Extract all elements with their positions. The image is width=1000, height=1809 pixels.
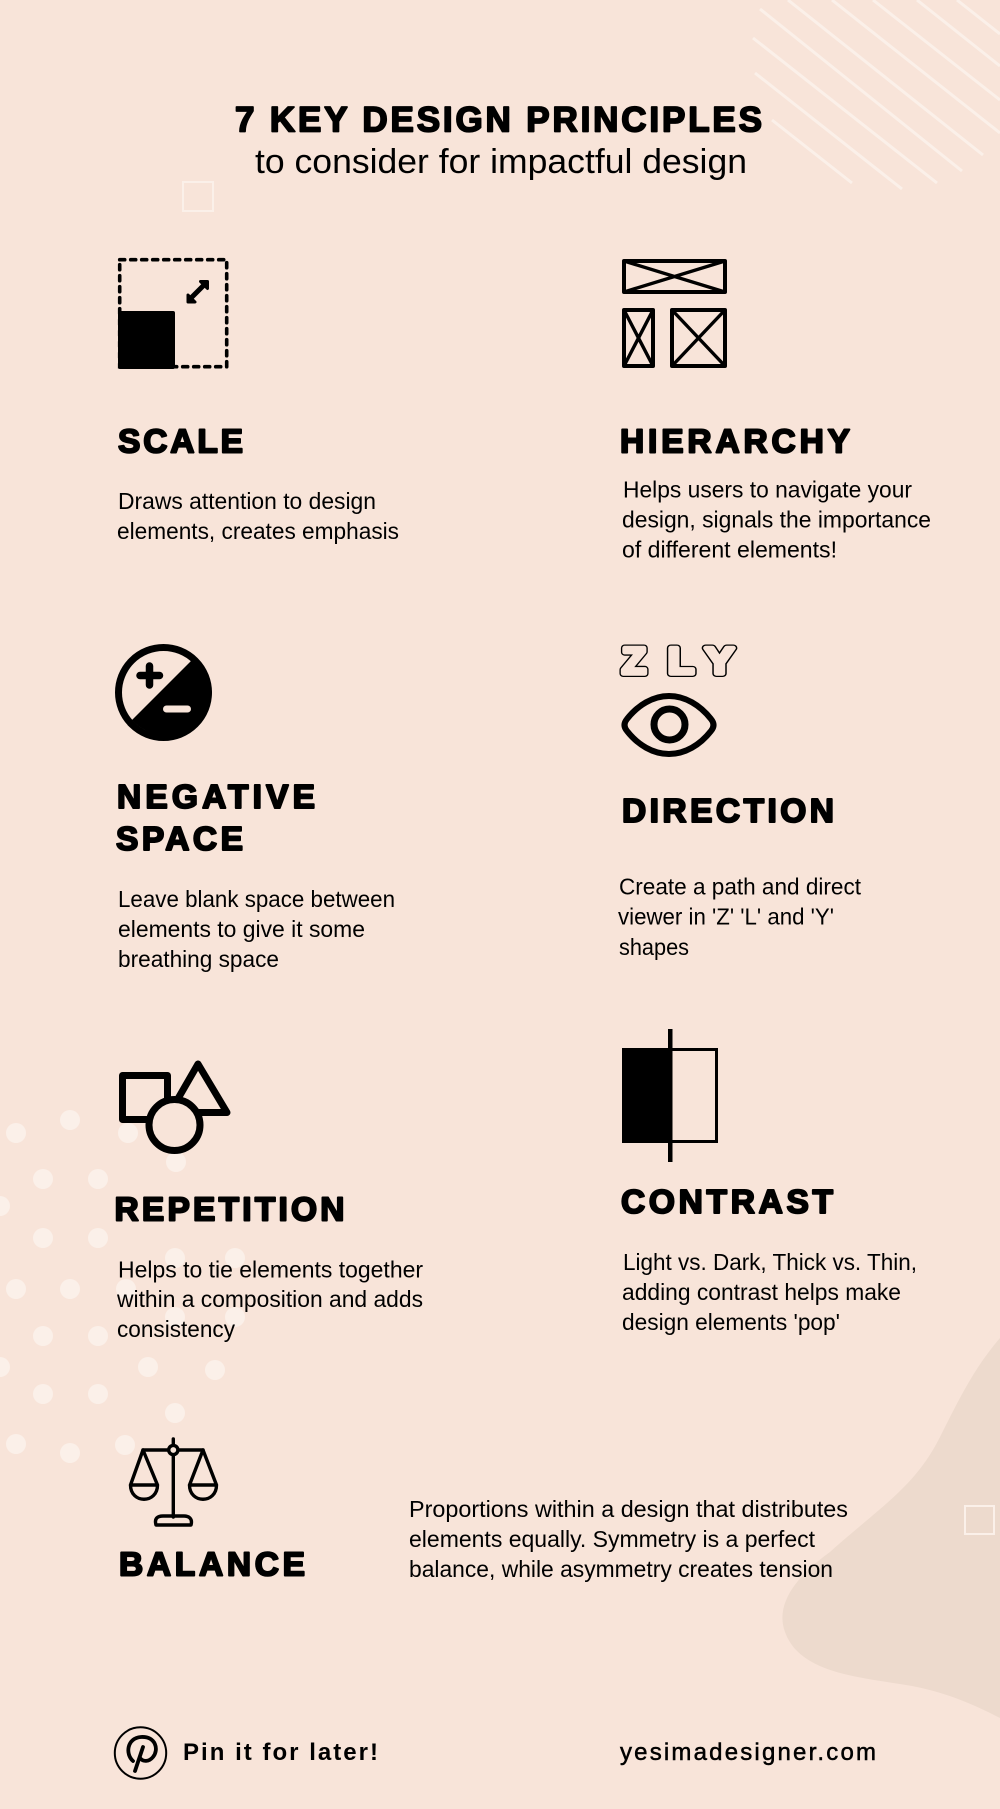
decorative small square right [965,1506,994,1534]
icon: outlined ZLY letters: L [668,640,694,682]
panel: negative space [116,648,395,972]
text: scale description: Draws attention to design [118,488,376,514]
heading: balance: BALANCE [119,1546,305,1584]
text: negative space description: elements to give it some [118,916,365,942]
icon: balance scales [130,1439,216,1525]
text: hierarchy description [622,476,931,562]
icon: outlined ZLY letters: Z [622,640,646,682]
heading: negative space: SPACE [116,821,243,858]
text: repetition description: Helps to tie elements together [118,1256,423,1282]
heading: repetition: REPETITION [114,1192,344,1228]
text: balance description: balance, while asymmetry creates tension [409,1556,833,1582]
text: hierarchy description: of different elements! [622,536,837,562]
text: balance description [409,1496,848,1582]
text: direction description: viewer in 'Z' 'L' and 'Y' [618,904,834,930]
text: negative space description: breathing space [118,946,279,972]
text: direction description: Create a path and direct [619,874,862,900]
heading: scale: SCALE [118,424,243,460]
background diagonal stripes [753,0,1000,189]
icon: outlined ZLY letters: Y [705,640,734,682]
text: contrast description: Light vs. Dark, Thick vs. Thin, [623,1249,917,1275]
text: website: yesimadesigner.com [620,1739,876,1766]
icon: pinterest [115,1727,166,1779]
text: direction description [618,874,862,960]
panel: repetition [114,1064,423,1342]
decorative small square top [183,182,213,211]
icon: outlined ZLY letters: L [668,640,694,682]
background blob [782,1338,1000,1718]
text: balance description: Proportions within a design that distributes [409,1496,848,1522]
icon: negative space [118,648,212,738]
panel: balance [119,1439,848,1584]
heading: contrast: CONTRAST [621,1184,834,1221]
icon: scale [118,260,227,369]
icon: eye [624,696,714,754]
icon: repetition shapes [122,1064,227,1150]
icon: outlined ZLY letters: Y [705,640,734,682]
icon: contrast [622,1029,716,1162]
text: repetition description: within a composition and adds [116,1286,423,1312]
heading: hierarchy: HIERARCHY [620,424,850,460]
footer [115,1727,876,1779]
panel: direction [618,640,862,960]
heading: negative space [116,779,315,858]
icon: outlined ZLY letters: Z [622,640,646,682]
text: direction description: shapes [619,934,689,960]
text: pin it for later: Pin it for later! [183,1739,378,1766]
text: contrast description: design elements 'pop' [622,1309,840,1335]
text: contrast description [622,1249,917,1335]
text: scale description [117,488,399,544]
title [235,100,762,181]
text: repetition description [116,1256,423,1342]
text: negative space description [118,886,395,972]
subtitle: to consider for impactful design [255,143,747,181]
text: scale description: elements, creates emphasis [117,518,399,544]
text: negative space description: Leave blank space between [118,886,395,912]
icon: hierarchy wireframe [624,261,725,366]
text: repetition description: consistency [117,1316,235,1342]
text: hierarchy description: Helps users to navigate your [623,476,912,502]
panel: hierarchy [620,261,931,562]
icon: outlined ZLY letters [622,640,734,682]
text: balance description: elements equally. Symmetry is a perfect [409,1526,816,1552]
text: contrast description: adding contrast helps make [622,1279,901,1305]
panel: contrast [621,1029,917,1335]
background dot pattern [0,1110,245,1463]
text: hierarchy description: design, signals the importance [622,506,931,532]
heading: negative space: NEGATIVE [117,779,315,816]
title heading: 7 KEY DESIGN PRINCIPLES [235,100,762,140]
heading: direction: DIRECTION [622,793,834,830]
panel: scale [117,260,399,544]
